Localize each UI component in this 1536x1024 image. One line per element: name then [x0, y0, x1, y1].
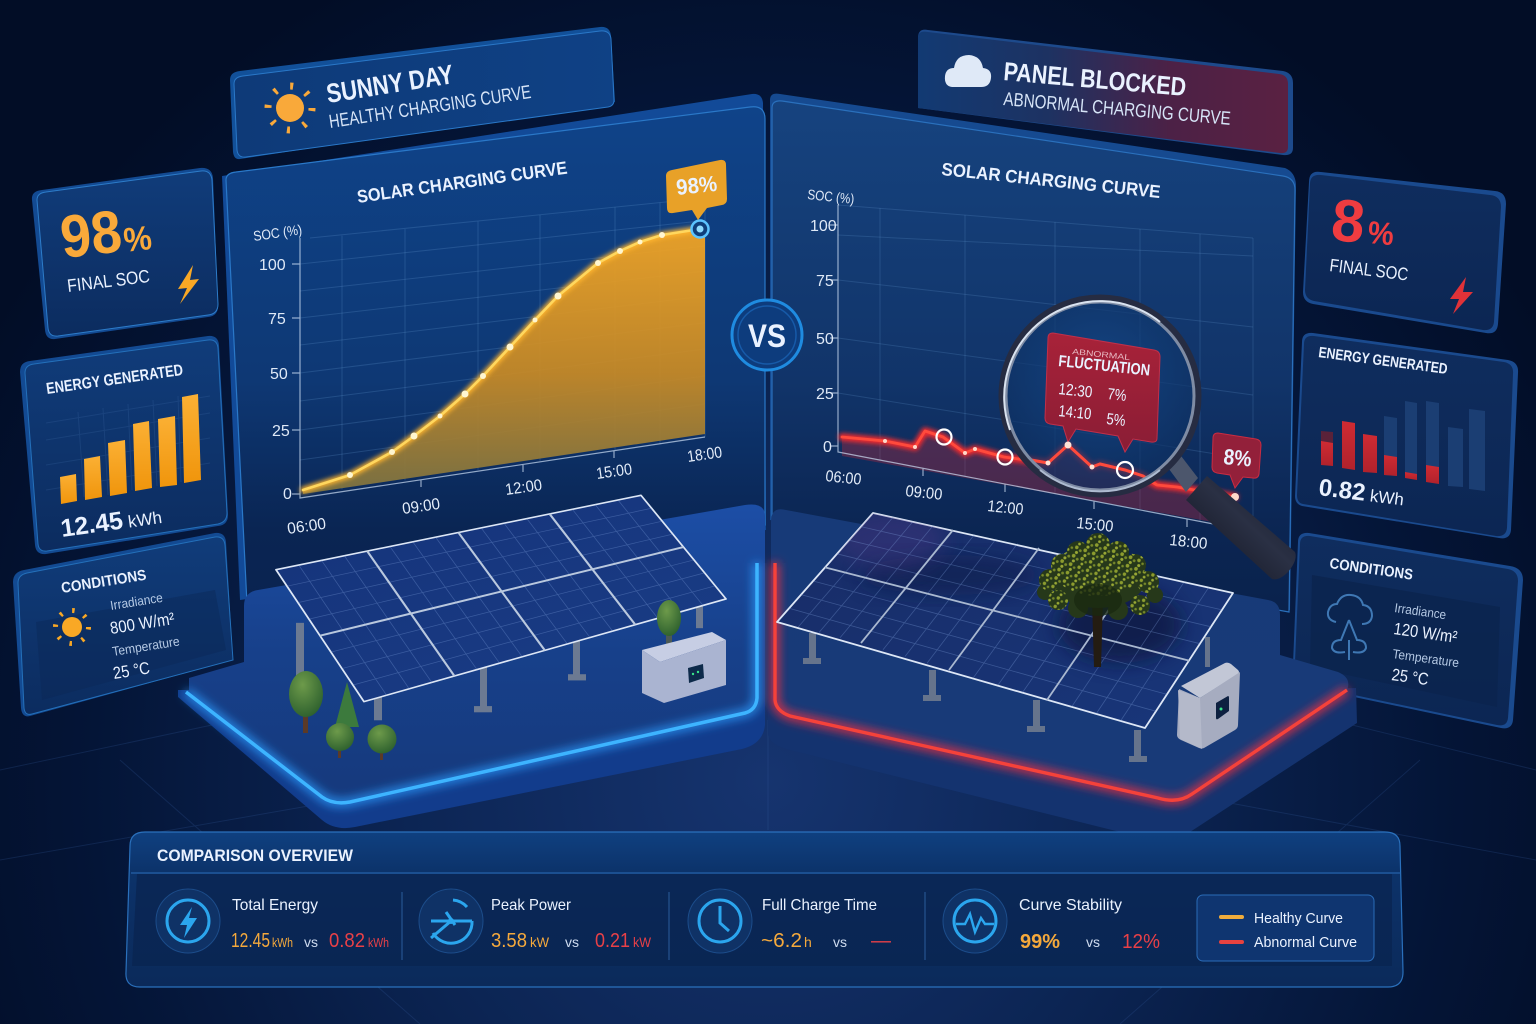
energy value: 12.45kWh — [59, 501, 163, 543]
energy title: ENERGY GENERATED — [1317, 344, 1449, 378]
icon: gauge circle — [419, 889, 483, 953]
bar chart — [1321, 401, 1485, 491]
metric: peak power: Peak Power — [491, 897, 572, 914]
axes — [830, 205, 1250, 531]
metric: total energy: kWh — [368, 935, 389, 950]
metric: total energy: 12.45 — [231, 930, 270, 952]
metric: total energy — [156, 889, 389, 953]
y axis labels: 0 — [823, 439, 832, 456]
shadow on panels — [835, 510, 1182, 663]
x axis labels: 06:00 — [286, 516, 327, 538]
small tree left — [326, 723, 354, 758]
lens markers — [1046, 442, 1133, 478]
icon: sun — [268, 86, 312, 130]
marker rings — [936, 430, 1012, 464]
callout 8%: 8% — [1223, 444, 1253, 471]
end marker — [692, 220, 708, 238]
y axis labels — [807, 186, 855, 456]
x axis labels: 12:00 — [504, 477, 543, 499]
x axis labels: 18:00 — [686, 444, 723, 466]
callout 98% — [666, 160, 727, 220]
inverter: sunny day — [642, 632, 726, 703]
y axis labels: 100 — [810, 218, 837, 235]
solar array: blocked — [777, 510, 1233, 762]
trees: sunny day — [289, 600, 681, 760]
sunny day subtitle: HEALTHY CHARGING CURVE — [328, 82, 532, 133]
value 8%: 8 — [1329, 186, 1368, 256]
irradiance reading: 120 W/m² — [1392, 619, 1459, 647]
curve data points — [347, 232, 665, 478]
legend: Abnormal Curve — [1254, 935, 1357, 951]
legend: Healthy Curve — [1254, 911, 1343, 927]
temperature reading: Temperature — [111, 634, 181, 659]
y axis labels: SOC (%) — [807, 186, 855, 207]
icon: bolt — [178, 265, 199, 304]
y axis labels — [252, 221, 303, 503]
temperature reading: 25 °C — [1390, 665, 1430, 689]
tree: blocking the panel — [1037, 533, 1163, 667]
right stat card: final soc: % — [1366, 214, 1395, 252]
curve line — [303, 229, 700, 490]
abnormal fluctuation callout: 12:30 — [1058, 381, 1093, 402]
sunny day title: SUNNY DAY — [324, 59, 455, 109]
energy title: ENERGY GENERATED — [45, 362, 184, 398]
temperature reading: 25 °C — [112, 658, 151, 683]
callout 98%: 98% — [675, 171, 718, 200]
y axis labels: 25 — [816, 386, 834, 403]
left stat card: energy generated — [20, 336, 228, 554]
abnormal fluctuation callout: ABNORMAL — [1072, 347, 1131, 362]
abnormal fluctuation callout — [1045, 333, 1160, 452]
overview title: COMPARISON OVERVIEW — [157, 846, 354, 865]
callout 8% — [1212, 433, 1261, 488]
solar array: sunny day — [276, 495, 726, 720]
left stat card: final soc: % — [122, 219, 154, 260]
metric: full charge time: Full Charge Time — [762, 897, 877, 914]
icon: bolt — [1450, 277, 1473, 314]
x axis labels — [286, 444, 723, 538]
end dot — [1231, 493, 1239, 501]
right stat card: energy generated — [1295, 333, 1518, 538]
abnormal fluctuation callout: 14:10 — [1058, 403, 1092, 423]
metric: peak power — [419, 889, 652, 953]
conifer — [335, 682, 359, 727]
small tree right — [368, 724, 396, 760]
metric: total energy: Total Energy — [232, 897, 318, 914]
icon: cloud with tree — [1328, 595, 1372, 660]
abnormal fluctuation callout: 7% — [1107, 386, 1127, 405]
y axis labels: 75 — [268, 311, 286, 328]
metric: total energy: kWh — [272, 935, 293, 950]
metric: full charge time: vs — [833, 934, 847, 950]
final soc label: FINAL SOC — [66, 266, 151, 296]
magnifying glass — [1002, 298, 1296, 579]
right stat card: final soc — [1303, 172, 1506, 333]
lens curve segment — [1020, 445, 1157, 485]
metric: peak power: kW — [530, 934, 550, 950]
metric: curve stability: Curve Stability — [1019, 897, 1122, 914]
metric: curve stability — [943, 889, 1160, 953]
irradiance reading: 800 W/m² — [109, 609, 176, 638]
tree behind inverter — [657, 600, 681, 647]
abnormal fluctuation callout: 5% — [1106, 411, 1126, 430]
panel: blocked main chart panel — [770, 94, 1296, 612]
x axis labels: 09:00 — [905, 483, 943, 504]
y axis labels: 75 — [816, 273, 834, 290]
bar chart — [46, 394, 210, 504]
red curve line — [842, 431, 1235, 497]
chart title: SOLAR CHARGING CURVE — [941, 159, 1161, 202]
chart: healthy solar charging curve — [252, 158, 727, 538]
inverter: blocked — [1177, 663, 1240, 749]
conditions title: CONDITIONS — [60, 567, 148, 597]
metric: peak power: 3.58 — [491, 930, 527, 952]
abnormal fluctuation callout: FLUCTUATION — [1058, 353, 1151, 380]
x axis labels: 06:00 — [825, 468, 862, 489]
metric: peak power: 0.21 — [595, 930, 630, 952]
metric: full charge time: h — [804, 934, 812, 950]
support posts — [803, 633, 1210, 762]
right stat card: conditions — [1293, 533, 1523, 728]
metric: full charge time: ~6.2 — [761, 930, 802, 952]
x axis labels: 09:00 — [401, 496, 441, 518]
y axis labels: SOC (%) — [252, 221, 303, 244]
icon: pulse circle — [943, 889, 1007, 953]
ring — [1002, 298, 1198, 494]
metric: curve stability: 99% — [1020, 931, 1060, 953]
header: panel blocked — [918, 30, 1293, 155]
metric: total energy: 0.82 — [329, 930, 365, 952]
irradiance reading — [1392, 600, 1459, 647]
chart: abnormal solar charging curve — [807, 159, 1261, 553]
y axis labels: 50 — [816, 331, 834, 348]
big tree — [289, 671, 323, 733]
y axis labels: 50 — [270, 366, 288, 383]
support posts — [296, 596, 703, 720]
platform: blocked base — [768, 509, 1357, 832]
y axis labels: 25 — [272, 423, 290, 440]
metric: curve stability: vs — [1086, 934, 1100, 950]
energy value: 0.82kWh — [1317, 474, 1406, 511]
legend — [1197, 895, 1374, 961]
x axis labels: 18:00 — [1169, 532, 1208, 553]
left stat card: conditions — [13, 533, 233, 716]
vs badge — [732, 300, 802, 370]
metric: total energy: vs — [304, 934, 318, 950]
x axis labels: 15:00 — [595, 461, 633, 483]
panel: comparison overview — [126, 832, 1403, 987]
temperature reading — [111, 634, 181, 683]
y axis labels: 0 — [283, 486, 292, 503]
left stat card: final soc — [32, 168, 218, 339]
panel: sunny day main chart panel — [222, 94, 766, 604]
vs badge: VS — [748, 318, 786, 354]
y axis labels: 100 — [259, 257, 286, 274]
axes — [292, 238, 705, 498]
irradiance reading — [109, 590, 176, 638]
temperature reading — [1390, 646, 1460, 689]
irradiance reading: Irradiance — [1394, 600, 1447, 622]
metric: curve stability: 12% — [1122, 931, 1160, 953]
chart title: SOLAR CHARGING CURVE — [356, 158, 568, 207]
icon: clock circle — [688, 889, 752, 953]
metric: full charge time — [688, 889, 891, 953]
irradiance reading: Irradiance — [109, 590, 164, 613]
panel blocked title: PANEL BLOCKED — [1002, 56, 1187, 102]
x axis labels: 12:00 — [987, 498, 1024, 519]
curve data points — [883, 439, 977, 455]
x axis labels — [825, 468, 1208, 553]
x axis labels: 15:00 — [1076, 515, 1114, 536]
platform: sunny day base — [178, 504, 765, 828]
metric: full charge time: — — [871, 930, 891, 952]
lens — [1006, 302, 1194, 490]
metric: peak power: vs — [565, 934, 579, 950]
temperature reading: Temperature — [1392, 646, 1460, 670]
metric: peak power: kW — [633, 934, 652, 950]
value 98%: 98 — [57, 197, 125, 271]
handle — [1166, 452, 1296, 579]
panel blocked subtitle: ABNORMAL CHARGING CURVE — [1003, 89, 1232, 130]
header: sunny day — [230, 27, 615, 159]
icon: cloud — [945, 55, 991, 87]
orange area under curve — [303, 229, 705, 494]
final soc label: FINAL SOC — [1329, 255, 1409, 285]
icon: bolt circle — [156, 889, 220, 953]
icon: sun — [56, 610, 88, 644]
conditions title: CONDITIONS — [1328, 555, 1414, 584]
red glow area — [842, 431, 1235, 526]
